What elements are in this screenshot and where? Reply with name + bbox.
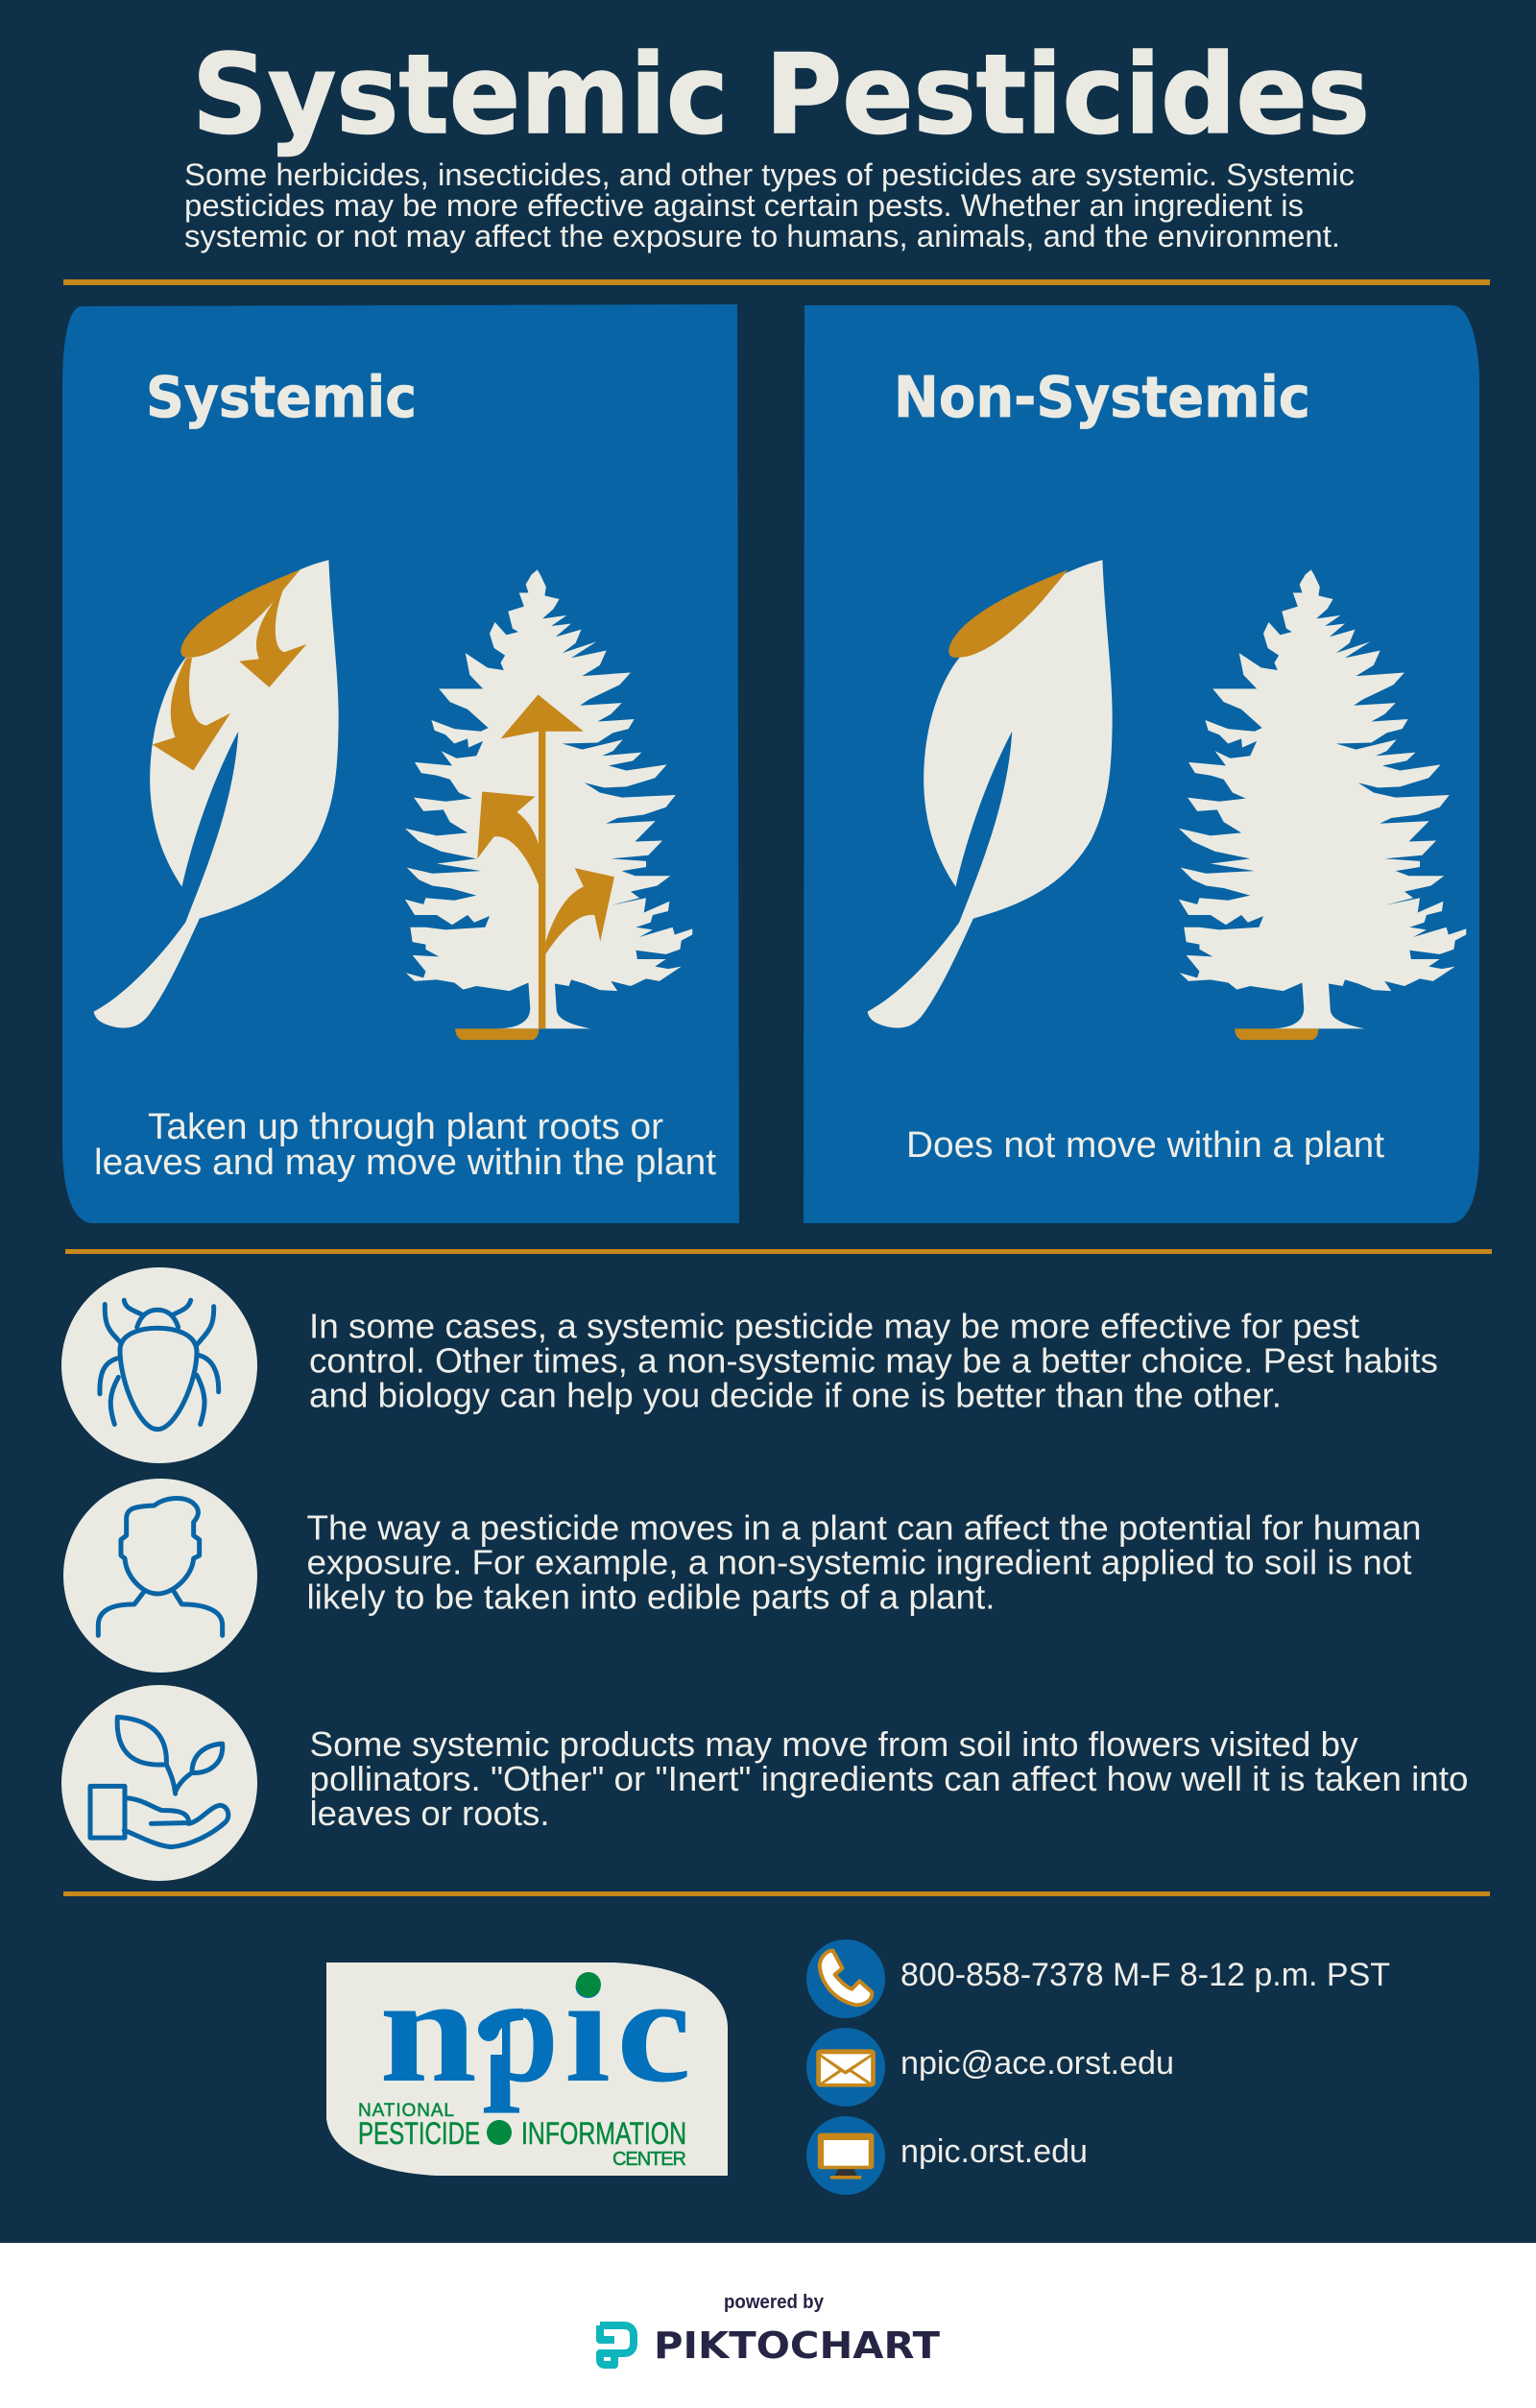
text: pollinators: pollinators. "Other" or "Inert" ingredients can affect how well it is taken into: [309, 1759, 1469, 1798]
text: pollinators: leaves or roots.: [309, 1794, 549, 1833]
caption: systemic: Taken up through plant roots or: [148, 1107, 663, 1147]
logo: npic: INFORMATION: [521, 2116, 686, 2151]
text: human exposure: The way a pesticide moves in a plant can affect the potential for human: [307, 1507, 1421, 1548]
icon: leaf: [868, 560, 1113, 1028]
piktochart wordmark: PIKTOCHART: [654, 2324, 940, 2367]
title: Systemic Pesticides: [192, 31, 1370, 158]
text: pest control: In some cases, a systemic pesticide may be more effective for pest: [309, 1306, 1359, 1346]
logo wordmark: n: [379, 1946, 477, 2114]
icon: piktochart logo: [600, 2325, 634, 2365]
text: website: npic.orst.edu: [900, 2133, 1088, 2170]
caption: non-systemic: Does not move within a plant: [906, 1125, 1384, 1166]
text: human exposure: exposure. For example, a non-systemic ingredient applied to soil is not: [307, 1542, 1411, 1582]
icon: leaf with arrows: [94, 560, 339, 1028]
text: email: npic@ace.orst.edu: [900, 2045, 1174, 2082]
icon: phone: [806, 1939, 885, 2018]
intro text: Some herbicides, insecticides, and other types of pesticides are systemic. Systemic: [184, 157, 1355, 192]
icon: bug circle: [61, 1267, 257, 1463]
icon: plant in hand circle: [61, 1685, 257, 1881]
logo: npic: NATIONAL: [358, 2101, 454, 2121]
caption: systemic: [94, 1107, 716, 1183]
text: pest control: and biology can help you decide if one is better than the other.: [309, 1375, 1282, 1415]
text: pollinators: Some systemic products may move from soil into flowers visited by: [309, 1724, 1357, 1764]
intro text: [184, 157, 1355, 253]
heading: systemic: Systemic: [146, 364, 417, 430]
caption: systemic: leaves and may move within the plant: [94, 1143, 716, 1183]
logo wordmark: i: [564, 1946, 611, 2114]
icon: tree with arrows: [405, 569, 692, 1040]
text: pest control: control. Other times, a non-systemic may be a better choice. Pest habits: [309, 1340, 1438, 1381]
footer: [0, 2243, 1536, 2408]
icon: person circle: [63, 1479, 257, 1673]
icon: monitor: [806, 2116, 885, 2195]
icon: tree: [1179, 569, 1466, 1040]
text: pest control: [309, 1306, 1438, 1415]
logo wordmark: [379, 1946, 691, 2114]
logo: npic: PESTICIDE: [358, 2116, 480, 2151]
intro text: pesticides may be more effective against certain pests. Whether an ingredient is: [184, 188, 1304, 223]
text: phone: 800-858-7378 M-F 8-12 p.m. PST: [900, 1957, 1390, 1993]
logo: npic: CENTER: [612, 2149, 686, 2170]
icon: email: [806, 2028, 885, 2107]
text: pollinators: [309, 1724, 1469, 1833]
panel: non-systemic: [804, 305, 1479, 1223]
logo wordmark: c: [616, 1946, 691, 2114]
panel: systemic: [62, 304, 739, 1223]
text: human exposure: likely to be taken into edible parts of a plant.: [307, 1577, 995, 1617]
powered by: powered by: [724, 2292, 825, 2313]
heading: non-systemic: Non-Systemic: [894, 364, 1310, 430]
text: human exposure: [307, 1507, 1421, 1617]
intro text: systemic or not may affect the exposure to humans, animals, and the environment.: [184, 219, 1340, 253]
logo: npic: [326, 1946, 728, 2176]
logo wordmark: p: [482, 1946, 559, 2114]
